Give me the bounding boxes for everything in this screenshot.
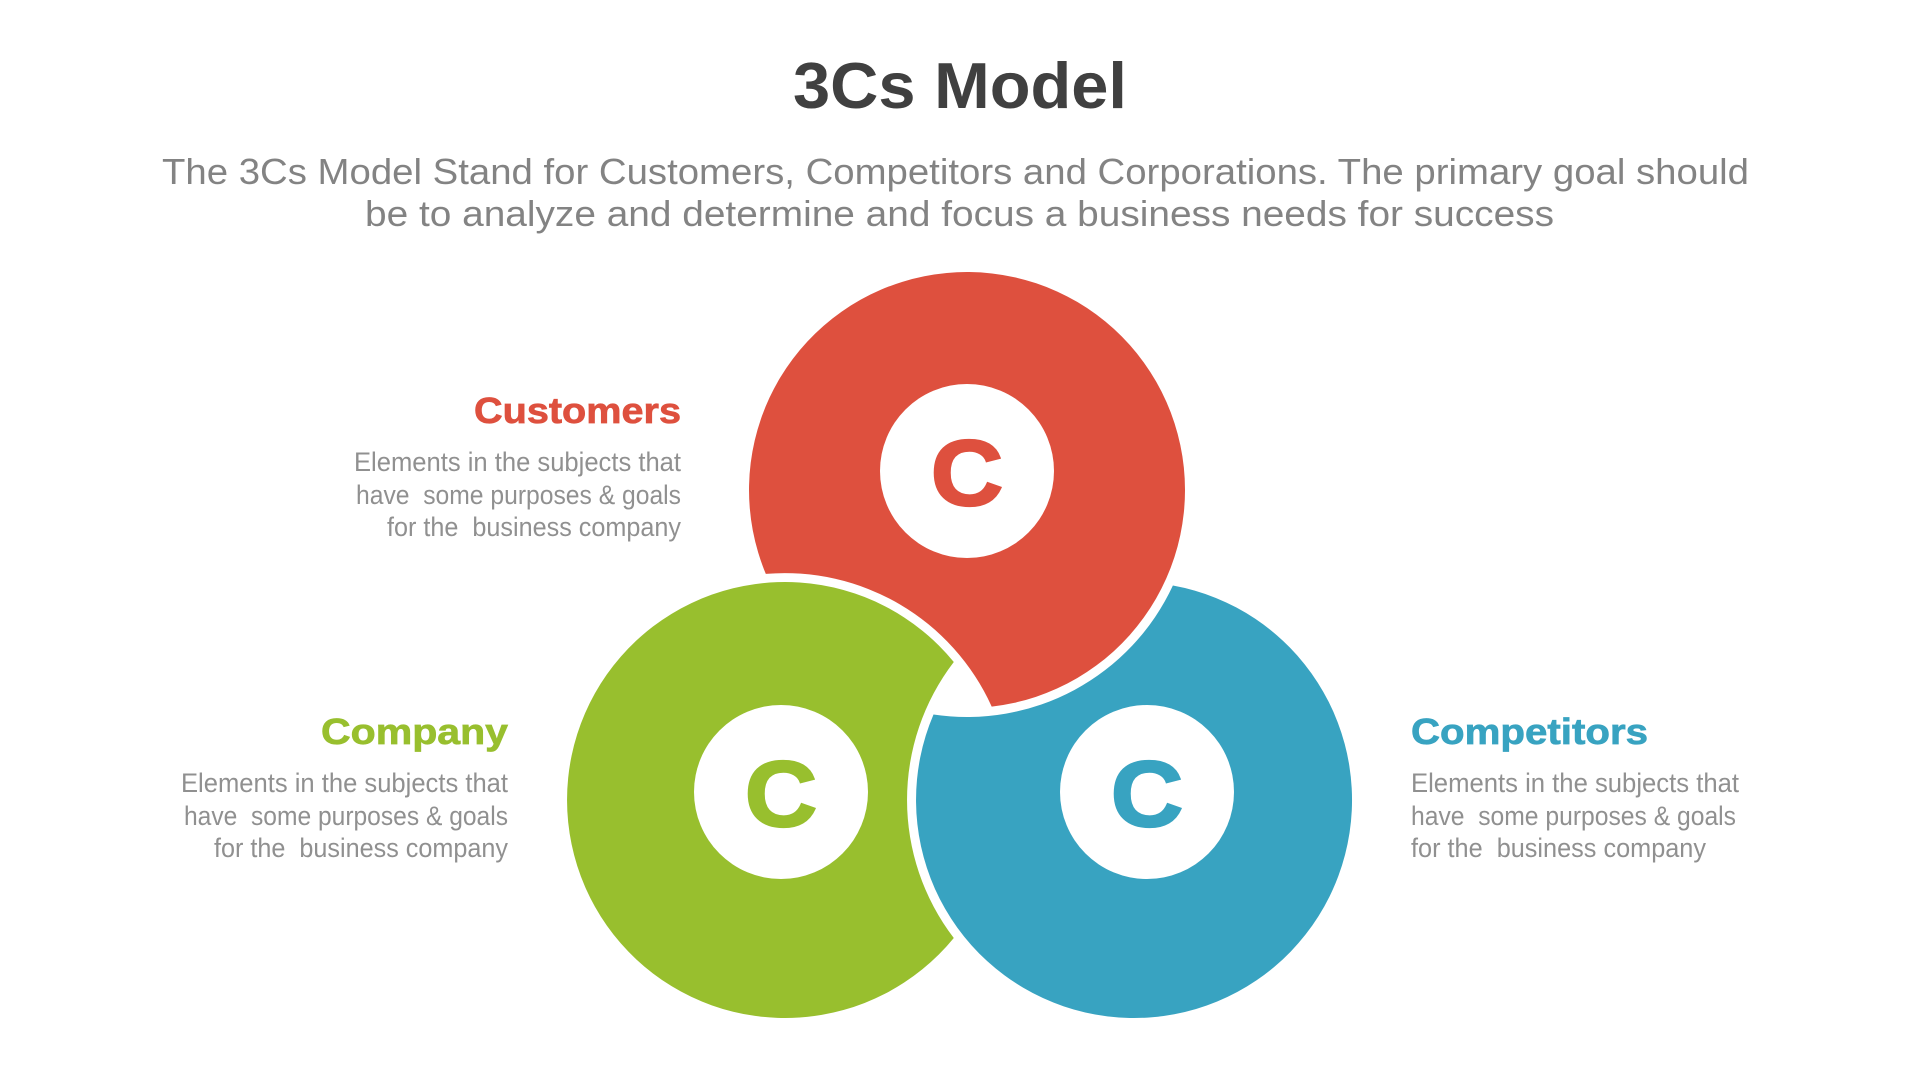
text block: competitors: for the business company: [1411, 833, 1706, 863]
subtitle: be to analyze and determine and focus a business needs for success: [365, 193, 1554, 234]
text block: customers: for the business company: [387, 512, 681, 542]
panel: competitors circle: C: [1111, 743, 1183, 846]
text block: company: for the business company: [214, 833, 508, 863]
text block: competitors: Elements in the subjects that: [1411, 768, 1739, 798]
panel: company circle: [567, 582, 954, 1018]
text block: company: have some purposes & goals: [184, 801, 508, 831]
panel: customers circle: [749, 272, 1185, 707]
title: 3Cs Model: [793, 49, 1127, 122]
panel: company circle: C: [745, 743, 817, 846]
venn diagram: [567, 272, 1352, 1018]
text block: company: Elements in the subjects that: [181, 768, 508, 798]
text block: customers: [354, 390, 681, 542]
text block: customers: Elements in the subjects that: [354, 447, 681, 477]
text block: customers: have some purposes & goals: [356, 480, 681, 510]
text block: company: Company: [321, 711, 508, 752]
text block: company: [181, 711, 508, 863]
subtitle: [162, 151, 1749, 234]
subtitle: The 3Cs Model Stand for Customers, Competitors and Corporations. The primary goal should: [162, 151, 1749, 192]
text block: competitors: [1411, 711, 1739, 863]
panel: competitors circle: [916, 586, 1352, 1018]
text block: customers: Customers: [474, 390, 681, 431]
panel: customers circle: C: [931, 422, 1003, 525]
text block: competitors: Competitors: [1411, 711, 1648, 752]
text block: competitors: have some purposes & goals: [1411, 801, 1736, 831]
